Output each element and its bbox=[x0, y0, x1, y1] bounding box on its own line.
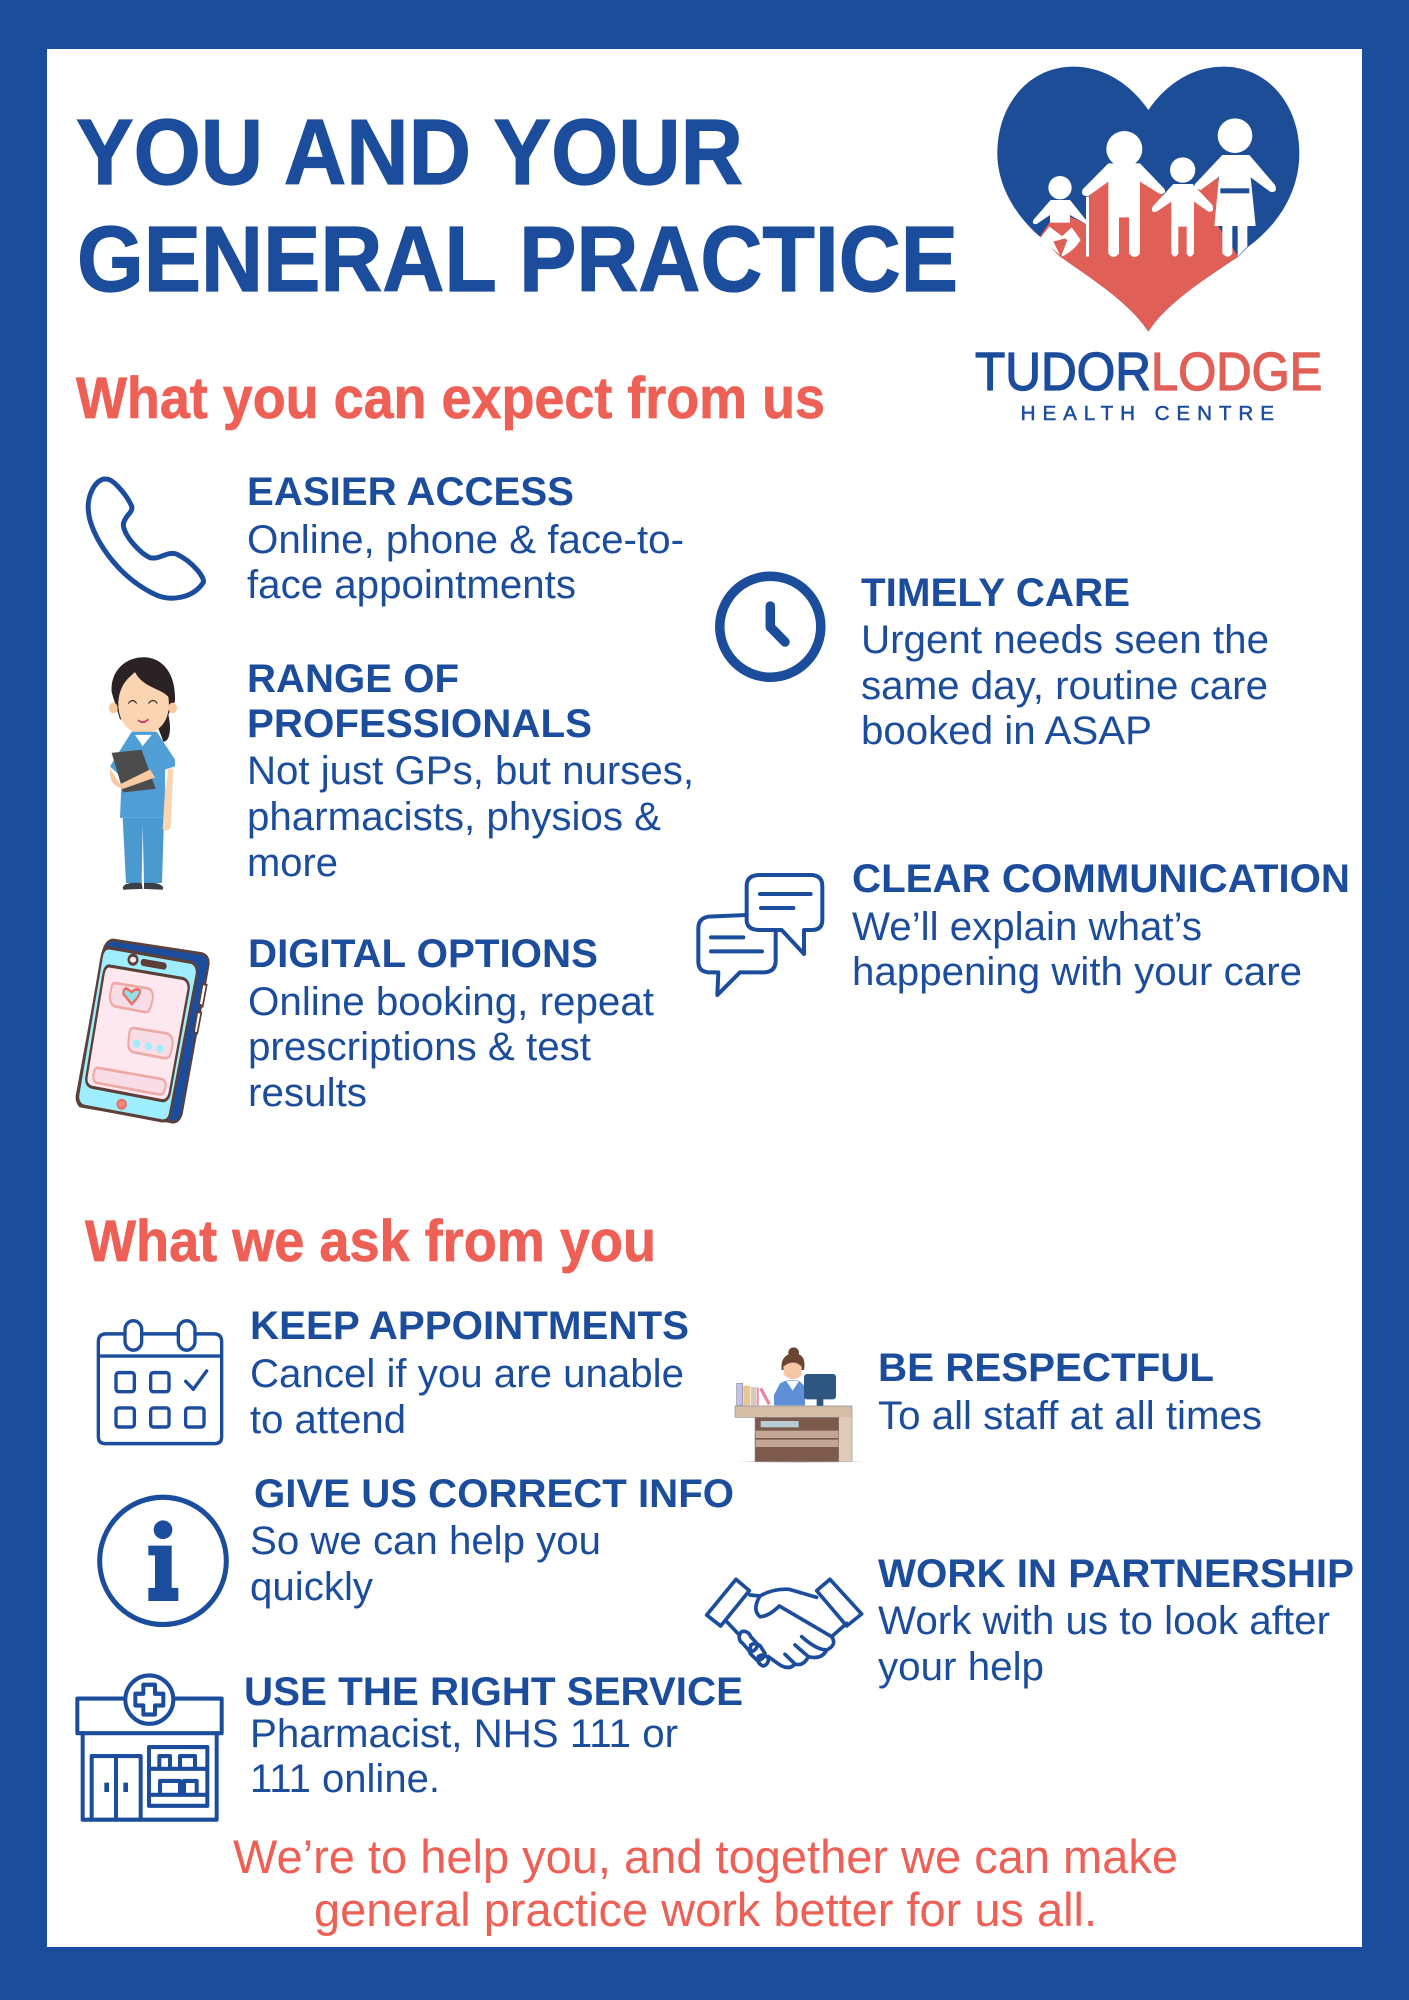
icon: receptionist at desk bbox=[735, 1347, 863, 1463]
text: give us correct info: GIVE US CORRECT INFO bbox=[254, 1472, 734, 1516]
text: clear communication: happening with your care bbox=[852, 950, 1302, 994]
text: work in partnership bbox=[878, 1552, 1354, 1689]
icon: pharmacy building bbox=[77, 1675, 222, 1820]
text: use the right service: USE THE RIGHT SERVICE bbox=[244, 1670, 743, 1714]
logo wordmark: HEALTH CENTRE bbox=[1021, 402, 1274, 425]
title: YOU AND YOUR bbox=[76, 100, 743, 204]
text: range of professionals bbox=[247, 657, 694, 885]
text: keep appointments: to attend bbox=[250, 1398, 406, 1442]
text: timely care: TIMELY CARE bbox=[861, 571, 1130, 615]
text: range of professionals: RANGE OF bbox=[247, 657, 459, 701]
icon: information bbox=[100, 1497, 226, 1625]
text: be respectful: BE RESPECTFUL bbox=[878, 1346, 1214, 1390]
text: timely care bbox=[861, 571, 1269, 753]
text: easier access: EASIER ACCESS bbox=[247, 470, 574, 514]
title bbox=[76, 100, 958, 311]
text: be respectful bbox=[878, 1346, 1262, 1438]
text: give us correct info: quickly bbox=[250, 1565, 373, 1609]
text: clear communication bbox=[852, 857, 1350, 994]
text: give us correct info bbox=[250, 1472, 734, 1609]
text: use the right service: Pharmacist, NHS 111 or bbox=[250, 1712, 678, 1756]
text: digital options: prescriptions & test bbox=[248, 1025, 591, 1069]
icon: chat bubbles bbox=[698, 875, 822, 995]
text: range of professionals: PROFESSIONALS bbox=[247, 702, 592, 746]
text: clear communication: We’ll explain what’s bbox=[852, 905, 1202, 949]
closing message: general practice work better for us all. bbox=[314, 1883, 1097, 1936]
logo heart with family bbox=[997, 67, 1299, 332]
closing message: We’re to help you, and together we can make bbox=[233, 1830, 1178, 1883]
text: range of professionals: more bbox=[247, 841, 338, 885]
text: digital options bbox=[248, 932, 654, 1115]
icon: handshake bbox=[707, 1579, 862, 1668]
text: keep appointments: Cancel if you are unable bbox=[250, 1352, 684, 1396]
text: keep appointments: KEEP APPOINTMENTS bbox=[250, 1304, 689, 1348]
logo wordmark: TUDOR bbox=[975, 343, 1151, 402]
text: timely care: same day, routine care bbox=[861, 664, 1268, 708]
text: range of professionals: Not just GPs, but nurses, bbox=[247, 749, 694, 793]
title: GENERAL PRACTICE bbox=[77, 207, 958, 311]
logo wordmark bbox=[975, 343, 1322, 425]
text: work in partnership: Work with us to look after bbox=[878, 1599, 1330, 1643]
text: give us correct info: So we can help you bbox=[250, 1519, 601, 1563]
text: easier access: Online, phone & face-to- bbox=[247, 518, 684, 562]
text: easier access bbox=[247, 470, 684, 607]
heading: what we ask from you: What we ask from you bbox=[85, 1209, 656, 1274]
text: timely care: Urgent needs seen the bbox=[861, 618, 1269, 662]
text: clear communication: CLEAR COMMUNICATION bbox=[852, 857, 1350, 901]
text: digital options: Online booking, repeat bbox=[248, 980, 654, 1024]
icon: nurse bbox=[109, 657, 177, 890]
text: range of professionals: pharmacists, physios & bbox=[247, 795, 661, 839]
icon: calendar bbox=[98, 1321, 222, 1444]
icon: smartphone bbox=[77, 940, 209, 1122]
text: use the right service bbox=[244, 1670, 743, 1801]
text: work in partnership: WORK IN PARTNERSHIP bbox=[878, 1552, 1354, 1596]
icon: telephone bbox=[88, 479, 203, 598]
logo: Tudor Lodge Health Centre bbox=[975, 67, 1322, 425]
closing message bbox=[233, 1830, 1178, 1936]
text: easier access: face appointments bbox=[247, 563, 576, 607]
text: be respectful: To all staff at all times bbox=[878, 1394, 1262, 1438]
text: timely care: booked in ASAP bbox=[861, 709, 1152, 753]
text: keep appointments bbox=[250, 1304, 689, 1442]
text: use the right service: 111 online. bbox=[250, 1757, 440, 1801]
icon: clock bbox=[720, 576, 821, 677]
text: digital options: results bbox=[248, 1071, 367, 1115]
heading: what you can expect from us: What you can expect from us bbox=[76, 366, 825, 431]
logo wordmark: LODGE bbox=[1151, 343, 1322, 402]
text: digital options: DIGITAL OPTIONS bbox=[248, 932, 598, 976]
text: work in partnership: your help bbox=[878, 1645, 1044, 1689]
